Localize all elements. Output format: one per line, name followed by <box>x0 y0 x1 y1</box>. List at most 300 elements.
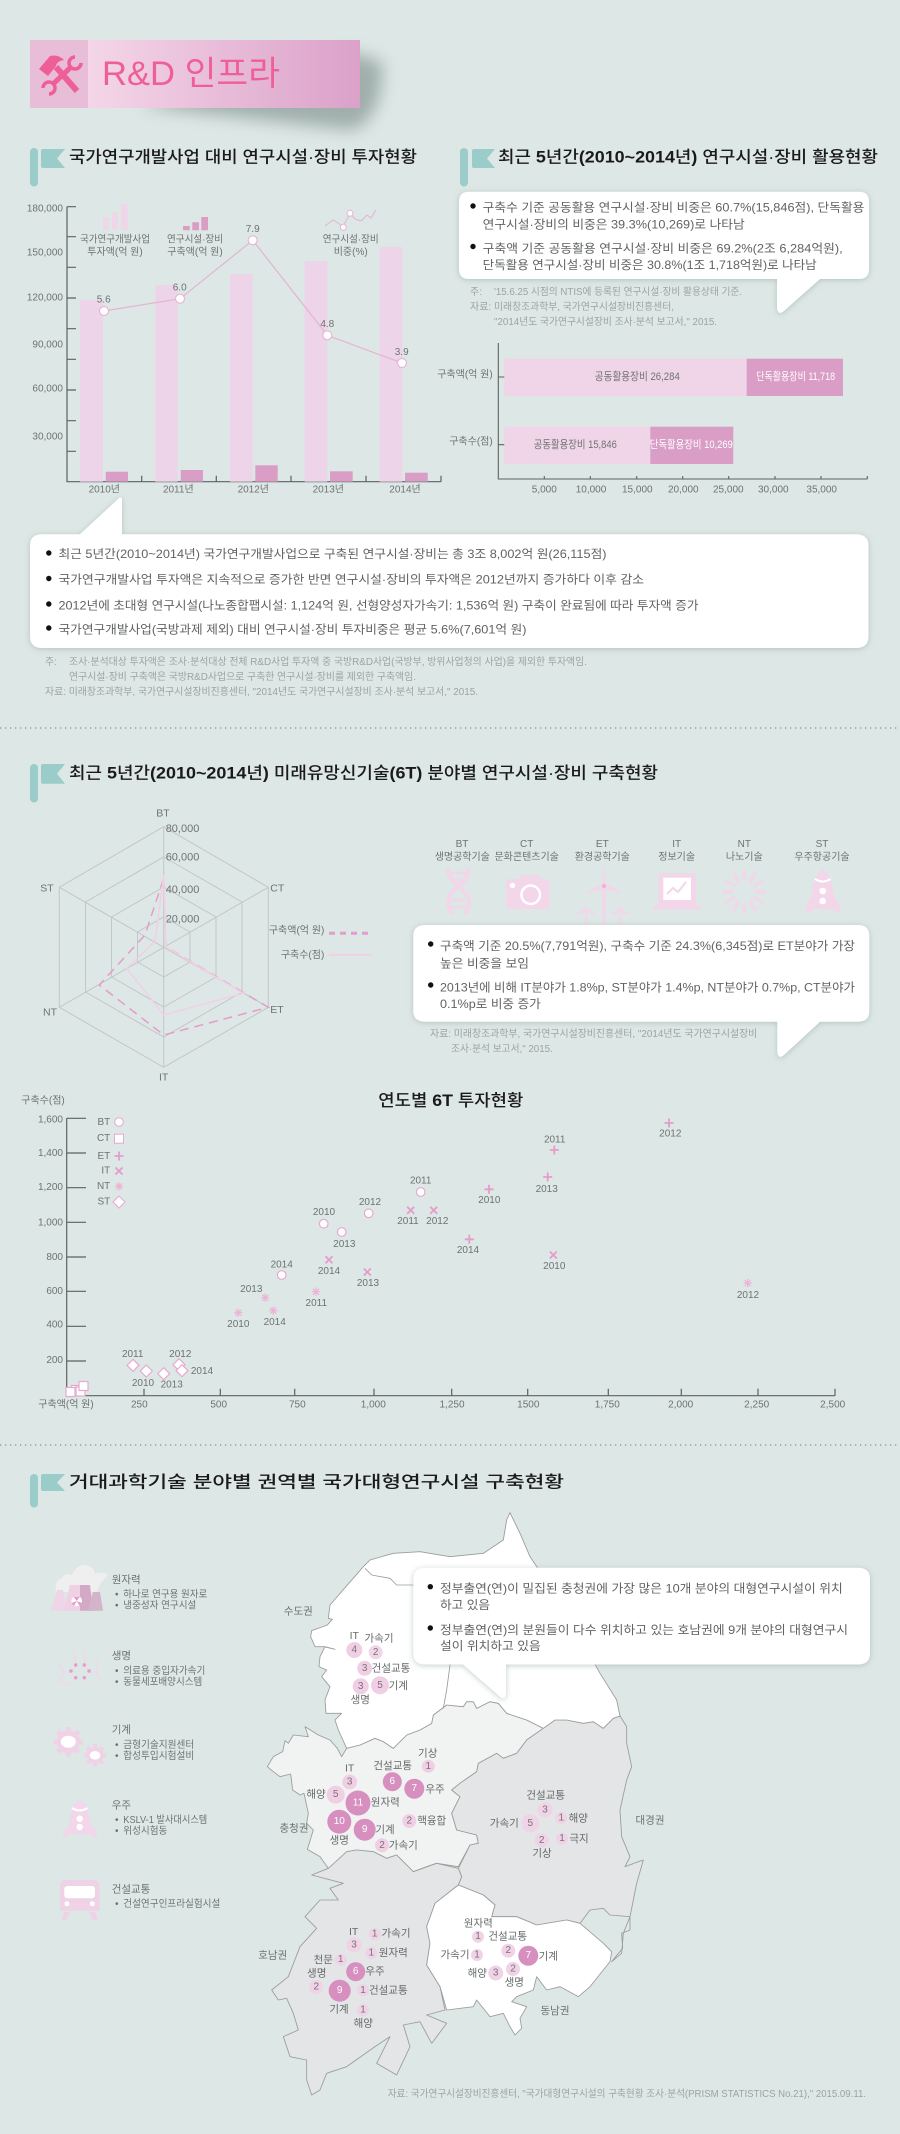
axis labels: 1,200 <box>38 1182 63 1193</box>
axis labels: 구축액(억 원) <box>38 1398 94 1410</box>
x labels <box>532 484 837 496</box>
field: space: KSLV-1 발사대시스템 <box>123 1814 207 1826</box>
Honam counts: 우주 <box>365 1965 385 1977</box>
Daegyeong counts: 2 <box>539 1835 545 1846</box>
Chungcheong counts: IT <box>345 1762 355 1774</box>
region: capital area and Gangwon <box>311 1513 620 1748</box>
notes: utilisation source: 주: <box>470 287 482 298</box>
Dongnam counts: 2 <box>506 1945 512 1956</box>
axis labels: 2,500 <box>820 1400 846 1410</box>
axes <box>498 343 867 479</box>
Chungcheong counts: 생명 <box>330 1835 349 1847</box>
field: life <box>58 1650 205 1688</box>
series: amount <box>99 878 268 1035</box>
Chungcheong counts: 5 <box>333 1789 339 1800</box>
Dongnam counts: 2 <box>510 1964 516 1974</box>
Chungcheong counts: 7 <box>412 1783 418 1794</box>
field: machinery: 기계 <box>112 1724 131 1736</box>
y labels: 90,000 <box>32 340 63 350</box>
Honam counts: 천문 <box>314 1954 333 1966</box>
notes: utilisation source: "2014년도 국가연구시설장비 조사·분석 보고서," 2015. <box>494 316 717 328</box>
heading: utilisation status: 최근 5년간(2010~2014 년) 연구시설·장비 활용현황 <box>498 147 878 166</box>
series: NT asterisks: 2013 <box>240 1284 263 1295</box>
Dongnam counts <box>441 1918 558 1988</box>
Honam counts: 가속기 <box>382 1928 410 1940</box>
axis labels: 200 <box>46 1355 63 1366</box>
notes: utilisation source: 자료: <box>470 301 491 313</box>
Dongnam counts: 7 <box>526 1950 532 1961</box>
field: nuclear: • <box>115 1590 119 1600</box>
callout: map: 하고 있음 <box>440 1598 490 1612</box>
count bar: 단독활용장비 10,269 <box>650 437 733 451</box>
scatter legend: CT <box>97 1133 110 1144</box>
icon: ET wind turbines: 환경공학기술 <box>575 850 630 863</box>
year labels <box>89 484 421 496</box>
Chungcheong counts: 2 <box>407 1816 413 1826</box>
axis labels: 1500 <box>517 1400 540 1410</box>
Chungcheong counts: 2 <box>379 1840 385 1851</box>
field: nuclear: 원자력 <box>112 1574 141 1586</box>
axes <box>67 207 441 482</box>
capital area counts: IT <box>350 1630 360 1642</box>
6T icon row <box>435 839 850 925</box>
series: ST diamonds: 2010 <box>132 1378 155 1389</box>
legend: facilities: 연구시설·장비 <box>167 234 223 246</box>
stacked bar chart: shared vs exclusive: 구축수(점) <box>449 436 493 448</box>
series: ST diamonds: 2011 <box>122 1349 144 1360</box>
axis labels: 1,000 <box>361 1400 386 1410</box>
icon: hammer and wrench <box>39 56 81 94</box>
field: nuclear: • <box>115 1600 119 1612</box>
field: life: 동물세포배양시스템 <box>123 1676 202 1688</box>
y labels <box>27 204 63 442</box>
y labels: 120,000 <box>27 292 63 304</box>
heading: big science facilities: 거대과학기술 분야별 권역별 국가대형연구시설 구축현황 <box>69 1472 564 1491</box>
callout: utilisation: 구축액 기준 공동활용 연구시설·장비 비중은 69.2%(2조 6,284억원), <box>483 241 843 255</box>
capital area counts <box>346 1630 411 1706</box>
icon: IT laptop: IT <box>672 839 681 850</box>
radar chart: 6T <box>40 807 372 1083</box>
capital area counts: 가속기 <box>365 1632 393 1644</box>
radar axis labels: CT <box>270 882 285 894</box>
Honam counts: 원자력 <box>379 1947 408 1959</box>
series: ET pluses: 2012 <box>659 1128 682 1140</box>
heading: 6T status: 최근 5년간(2010~2014 년) 미래유망신기술 (6T) 분야별 연구시설·장비 구축현황 <box>69 763 658 782</box>
callout: map <box>413 1568 870 1698</box>
year labels: 2013년 <box>313 484 344 496</box>
capital area counts: 기계 <box>389 1680 408 1692</box>
Daegyeong counts: 가속기 <box>490 1817 519 1829</box>
Honam counts: 해양 <box>354 2017 373 2030</box>
Daegyeong counts: 1 <box>559 1812 565 1824</box>
radar axis labels: NT <box>43 1006 58 1018</box>
series: IT crosses: 2010 <box>543 1261 566 1272</box>
Chungcheong counts: 11 <box>353 1798 364 1808</box>
Honam counts: 6 <box>353 1966 359 1977</box>
Dongnam counts: 생명 <box>505 1976 524 1988</box>
field: life: 생명 <box>112 1650 131 1662</box>
scatter legend: BT <box>98 1117 110 1128</box>
callout: R&D summary <box>30 497 868 648</box>
investment bars <box>80 247 402 482</box>
amount bar: 단독활용장비 11,718 <box>756 369 835 383</box>
field: construction and transport <box>60 1880 220 1920</box>
scatter legend: IT <box>101 1166 110 1176</box>
region labels: 수도권 <box>284 1606 313 1618</box>
Chungcheong counts: 우주 <box>425 1783 445 1795</box>
Honam counts: 1 <box>360 2004 366 2016</box>
Chungcheong counts: 기계 <box>375 1824 395 1836</box>
facility bars <box>106 465 428 482</box>
field: construction and transport: 건설연구인프라실험시설 <box>123 1898 220 1910</box>
series: ST diamonds: 2014 <box>191 1366 214 1377</box>
Chungcheong counts: 9 <box>362 1824 368 1835</box>
callout: R&D summary: 국가연구개발사업(국방과제 제외) 대비 연구시설·장비 투자비중은 평균 5.6%(7,601억 원) <box>58 622 526 636</box>
capital area counts: 3 <box>358 1681 364 1692</box>
map of South Korea <box>258 1513 664 2095</box>
Honam counts: 건설교통 <box>369 1984 408 1996</box>
icon: NT nano burst <box>722 839 766 914</box>
region labels: 동남권 <box>541 2005 569 2017</box>
radar axis labels: BT <box>156 807 170 819</box>
series: BT circles <box>271 1176 432 1279</box>
Daegyeong counts: 1 <box>559 1833 565 1844</box>
Daegyeong counts: 기상 <box>532 1847 552 1859</box>
notes: utilisation source <box>470 285 742 328</box>
axis labels: 800 <box>46 1252 63 1263</box>
callout: R&D summary: 2012년에 초대형 연구시설(나노종합팹시설: 1,124억 원, 선형양성자가속기: 1,536억 원) 구축이 완료됨에 따라 투자액 증가 <box>58 599 698 613</box>
Daegyeong counts <box>490 1790 589 1859</box>
Honam counts: 1 <box>338 1954 344 1965</box>
Honam counts <box>307 1926 410 2030</box>
stacked bar chart: shared vs exclusive: 구축액(억 원) <box>437 368 493 380</box>
amount bar: 공동활용장비 26,284 <box>595 369 680 383</box>
series: NT asterisks: 2011 <box>306 1298 327 1309</box>
field: life: • <box>115 1666 119 1677</box>
series: BT circles: 2011 <box>410 1176 432 1186</box>
x labels: 10,000 <box>576 484 607 496</box>
capital area counts: 3 <box>362 1663 368 1674</box>
axis labels: 2,000 <box>668 1400 694 1410</box>
region labels: 충청권 <box>280 1822 308 1834</box>
callout: 6T <box>413 925 869 1057</box>
callout: map: 정부출연(연)의 분원들이 다수 위치하고 있는 호남권에 9개 분야의 대형연구시 <box>440 1623 848 1637</box>
radar axis labels <box>40 807 285 1083</box>
radar axis labels: 40,000 <box>166 884 199 896</box>
callout: 6T: 구축액 기준 20.5%(7,791억원), 구축수 기준 24.3%(6,345점)로 ET분야가 가장 <box>440 939 855 953</box>
axis labels: 750 <box>289 1400 306 1410</box>
heading: yearly 6T investment: 연도별 6T 투자현황 <box>378 1091 523 1110</box>
series: BT circles: 2013 <box>333 1239 356 1250</box>
share line: 3.9 <box>395 347 409 358</box>
Honam counts: 생명 <box>307 1968 326 1980</box>
callout: R&D summary: 최근 5년간(2010~2014년) 국가연구개발사업으로 구축된 연구시설·장비는 총 3조 8,002억 원(26,115점) <box>58 547 606 561</box>
field: machinery: • <box>115 1740 119 1751</box>
y labels: 60,000 <box>32 384 63 394</box>
icon: NT nano burst: 나노기술 <box>726 851 763 863</box>
Chungcheong counts <box>306 1747 447 1852</box>
radar axis labels: 80,000 <box>166 823 199 835</box>
axis labels <box>21 1094 846 1410</box>
capital area counts: 4 <box>352 1644 358 1656</box>
Honam counts: 1 <box>369 1948 375 1958</box>
Chungcheong counts: 핵융합 <box>417 1815 447 1827</box>
axis labels: 2,250 <box>744 1400 770 1410</box>
icon: CT camera: 문화콘텐츠기술 <box>494 851 559 863</box>
field: space <box>63 1799 207 1838</box>
notes: R&D source: 주: <box>45 657 57 668</box>
year labels: 2014년 <box>389 484 421 496</box>
icon: BT DNA: BT <box>456 839 468 850</box>
share line: 7.9 <box>246 224 260 235</box>
field: machinery: 금형기술지원센터 <box>123 1739 194 1751</box>
radar axis labels: ST <box>40 882 54 894</box>
axis labels: 1,400 <box>38 1148 63 1159</box>
axis labels: 250 <box>131 1400 148 1410</box>
Chungcheong counts: 3 <box>347 1776 353 1788</box>
Daegyeong counts: 건설교통 <box>526 1790 565 1802</box>
Honam counts: 1 <box>372 1928 378 1940</box>
callout: utilisation: 단독활용 연구시설·장비 비중은 30.8%(1조 1,718억원)로 나타남 <box>483 258 817 272</box>
axis labels: 500 <box>210 1400 227 1410</box>
legend: investment: 투자액(억 원) <box>87 246 143 258</box>
Daegyeong counts: 5 <box>528 1818 534 1829</box>
callout: utilisation: 구축수 기준 공동활용 연구시설·장비 비중은 60.7%(15,846점), 단독활용 <box>483 201 864 215</box>
legend: investment <box>80 204 150 258</box>
note: 6T source <box>430 1027 757 1055</box>
field: life: • <box>115 1677 119 1688</box>
icon: IT laptop <box>653 839 701 909</box>
series: IT crosses: 2013 <box>357 1278 380 1289</box>
note: 6T source: 조사·분석 보고서," 2015. <box>451 1043 553 1055</box>
icon: IT laptop: 정보기술 <box>658 851 695 863</box>
series: ST diamonds: 2013 <box>161 1380 183 1390</box>
scatter legend: NT <box>97 1181 110 1192</box>
series: NT asterisks: 2014 <box>264 1317 286 1328</box>
capital area counts: 건설교통 <box>372 1662 411 1674</box>
Chungcheong counts: 10 <box>334 1816 345 1827</box>
y labels: 180,000 <box>27 204 63 214</box>
series: ST diamonds: 2012 <box>169 1349 192 1360</box>
Dongnam counts: 3 <box>493 1968 499 1978</box>
icon: ET wind turbines <box>575 839 630 925</box>
heading: utilisation status <box>460 147 878 186</box>
Dongnam counts: 기계 <box>539 1950 558 1962</box>
x labels: 15,000 <box>622 484 653 496</box>
regions <box>267 1513 643 2095</box>
field: space: • <box>115 1826 119 1837</box>
field: nuclear: 하나로 연구용 원자로 <box>123 1588 207 1600</box>
series: BT circles: 2014 <box>271 1260 293 1270</box>
icon: ST rocket <box>794 839 850 914</box>
year labels: 2012년 <box>238 484 269 496</box>
count bar <box>504 427 733 464</box>
field: machinery <box>54 1724 194 1767</box>
series: BT circles: 2010 <box>313 1207 336 1218</box>
Dongnam counts: 원자력 <box>464 1918 493 1930</box>
Honam counts: 9 <box>337 1985 343 1996</box>
Dongnam counts: 가속기 <box>441 1949 469 1961</box>
callout: map: 정부출연(연)이 밀집된 충청권에 가장 많은 10개 분야의 대형연구시설이 위치 <box>440 1581 843 1595</box>
axes <box>67 1118 835 1396</box>
axis labels: 1,000 <box>38 1218 63 1228</box>
icon: ST rocket: 우주항공기술 <box>794 851 850 863</box>
series: ET pluses: 2010 <box>478 1195 501 1206</box>
icon: BT DNA: 생명공학기술 <box>435 851 490 863</box>
Chungcheong counts: 6 <box>390 1776 396 1787</box>
heading: 6T status <box>30 763 658 802</box>
icon: ET wind turbines: ET <box>596 839 609 850</box>
field: nuclear: 냉중성자 연구시설 <box>123 1600 196 1612</box>
region: Chungcheong <box>267 1702 543 1872</box>
Daegyeong counts: 극지 <box>569 1833 589 1845</box>
year labels: 2011년 <box>163 484 194 496</box>
amount bar <box>504 359 843 396</box>
radar axis labels: 60,000 <box>166 852 199 864</box>
radar axis labels: ET <box>270 1004 284 1016</box>
series: NT asterisks: 2012 <box>737 1290 760 1301</box>
Chungcheong counts: 해양 <box>306 1787 326 1800</box>
share line <box>97 224 409 368</box>
radar axis labels: 20,000 <box>166 913 199 925</box>
Dongnam counts: 1 <box>475 1931 481 1942</box>
callout: R&D summary: 국가연구개발사업 투자액은 지속적으로 증가한 반면 연구시설·장비의 투자액은 2012년까지 증가하다 이후 감소 <box>58 573 644 587</box>
series: ET pluses: 2014 <box>457 1245 480 1256</box>
series: ET pluses: 2011 <box>544 1134 566 1146</box>
Chungcheong counts: 원자력 <box>371 1797 400 1809</box>
Chungcheong counts: 건설교통 <box>373 1760 412 1772</box>
Dongnam counts: 1 <box>474 1950 480 1960</box>
axis labels: 1,750 <box>595 1400 620 1410</box>
Honam counts: 기계 <box>329 2003 349 2015</box>
axis labels: 1,600 <box>38 1114 63 1126</box>
series: ET pluses <box>457 1118 682 1256</box>
notes: utilisation source: 미래창조과학부, 국가연구시설장비진흥센터, <box>494 300 674 313</box>
Honam counts: IT <box>349 1926 359 1938</box>
notes: R&D source <box>45 655 587 698</box>
Chungcheong counts: 가속기 <box>389 1840 418 1852</box>
icon: NT nano burst: NT <box>738 839 751 850</box>
legend: facilities: 구축액(억 원) <box>167 246 223 258</box>
series: IT crosses: 2011 <box>397 1216 419 1227</box>
radar legend: 구축액(억 원) <box>269 924 324 936</box>
share line: 4.8 <box>320 319 335 330</box>
series: IT crosses: 2012 <box>426 1216 449 1227</box>
callout: 6T: 높은 비중을 보임 <box>440 956 529 970</box>
x labels: 20,000 <box>668 484 699 496</box>
y labels: 30,000 <box>32 432 63 442</box>
notes: R&D source: 자료: 미래창조과학부, 국가연구시설장비진흥센터, "2014년도 국가연구시설장비 조사·분석 보고서," 2015. <box>45 685 478 698</box>
legend: share: 비중(%) <box>334 246 368 258</box>
Chungcheong counts: 기상 <box>418 1747 438 1759</box>
series: IT crosses: 2014 <box>318 1266 341 1277</box>
axis labels: 구축수(점) <box>21 1094 65 1106</box>
series: ST diamonds <box>122 1349 214 1390</box>
callout: 6T: 2013년에 비해 IT분야가 1.8%p, ST분야가 1.4%p, NT분야가 0.7%p, CT분야가 <box>440 980 855 994</box>
axis labels: 600 <box>46 1286 63 1297</box>
radar axis labels: IT <box>159 1071 169 1083</box>
Dongnam counts: 건설교통 <box>488 1931 527 1943</box>
field: nuclear <box>51 1565 207 1612</box>
series: BT circles: 2012 <box>359 1197 382 1208</box>
heading: big science facilities <box>30 1472 564 1508</box>
scatter legend <box>97 1117 125 1208</box>
notes: R&D source: 조사·분석대상 투자액은 조사·분석대상 전체 R&D사업 투자액 중 국방R&D사업(국방부, 방위사업청의 사업)을 제외한 투자액임. <box>69 655 587 668</box>
note: map source: 자료: 국가연구시설장비진흥센터, "국가대형연구시설의 구축현황 조사·분석(PRISM STATISTICS No.21)," 2015.09.11. <box>388 2087 866 2100</box>
icon: CT camera <box>494 839 559 909</box>
scatter chart: yearly 6T <box>21 1094 846 1410</box>
x labels: 30,000 <box>758 484 789 496</box>
x labels: 5,000 <box>532 484 557 496</box>
Daegyeong counts: 해양 <box>569 1811 588 1824</box>
region: Honam <box>272 1850 462 2095</box>
callout: 6T: 0.1%p로 비중 증가 <box>440 997 541 1011</box>
scatter legend: ST <box>98 1196 110 1208</box>
Honam counts: 2 <box>314 1982 320 1992</box>
legend: facilities <box>167 217 223 258</box>
field: construction and transport: • <box>115 1899 119 1910</box>
icon: CT camera: CT <box>520 839 533 850</box>
capital area counts: 생명 <box>351 1694 370 1706</box>
share line: 6.0 <box>173 282 187 294</box>
bar and line chart: R&D investment vs facility construction <box>27 204 441 496</box>
stacked bar chart: shared vs exclusive <box>437 343 867 496</box>
region labels: 호남권 <box>258 1950 287 1962</box>
legend: share: 연구시설·장비 <box>323 234 379 246</box>
field: machinery: 합성투입시험설비 <box>123 1749 194 1762</box>
region labels <box>258 1606 664 2017</box>
x labels: 35,000 <box>806 484 837 496</box>
year labels: 2010년 <box>89 484 120 496</box>
field: space: 우주 <box>112 1800 131 1812</box>
field: construction and transport: 건설교통 <box>112 1884 151 1896</box>
series: IT crosses <box>318 1207 566 1289</box>
series: count <box>127 875 243 1015</box>
notes: utilisation source: '15.6.25 시점의 NTIS에 등록된 연구시설·장비 활용상태 기준. <box>494 285 742 298</box>
radar legend: 구축수(점) <box>281 949 324 961</box>
field: life: 의료용 중입자가속기 <box>123 1664 205 1677</box>
capital area counts: 5 <box>377 1680 383 1691</box>
heading: investment status <box>30 147 417 186</box>
field: machinery: • <box>115 1751 119 1762</box>
heading: investment status: 국가연구개발사업 대비 연구시설·장비 투자현황 <box>69 147 417 166</box>
Honam counts: 3 <box>351 1940 357 1950</box>
icon: BT DNA <box>435 839 490 914</box>
region labels: 대경권 <box>636 1814 664 1827</box>
count bar: 공동활용장비 15,846 <box>534 437 617 451</box>
region: Daegyeong <box>452 1716 643 1962</box>
capital area counts: 2 <box>373 1647 379 1658</box>
note: 6T source: 자료: 미래창조과학부, 국가연구시설장비진흥센터, "2014년도 국가연구시설장비 <box>430 1027 757 1040</box>
Dongnam counts: 해양 <box>468 1966 487 1979</box>
share line: 5.6 <box>97 294 111 306</box>
callout: map: 설이 위치하고 있음 <box>440 1639 541 1653</box>
field: space: • <box>115 1815 119 1826</box>
y labels: 150,000 <box>27 248 63 258</box>
Daegyeong counts: 3 <box>542 1804 548 1816</box>
title banner <box>30 40 382 130</box>
series: CT squares <box>66 1382 88 1396</box>
legend panel: fields <box>51 1565 220 1920</box>
title text: R&D 인프라 <box>102 55 280 93</box>
callout: utilisation: 연구시설·장비의 비중은 39.3%(10,269)로 나타남 <box>483 217 745 231</box>
callout: utilisation <box>459 192 869 313</box>
axis labels: 1,250 <box>439 1400 465 1410</box>
icon: ST rocket: ST <box>816 839 828 850</box>
notes: R&D source: 연구시설·장비 구축액은 국방R&D사업으로 구축한 연구시설·장비를 제외한 구축액임. <box>69 670 416 683</box>
series: ET pluses: 2013 <box>536 1184 558 1195</box>
legend: share <box>323 210 379 258</box>
